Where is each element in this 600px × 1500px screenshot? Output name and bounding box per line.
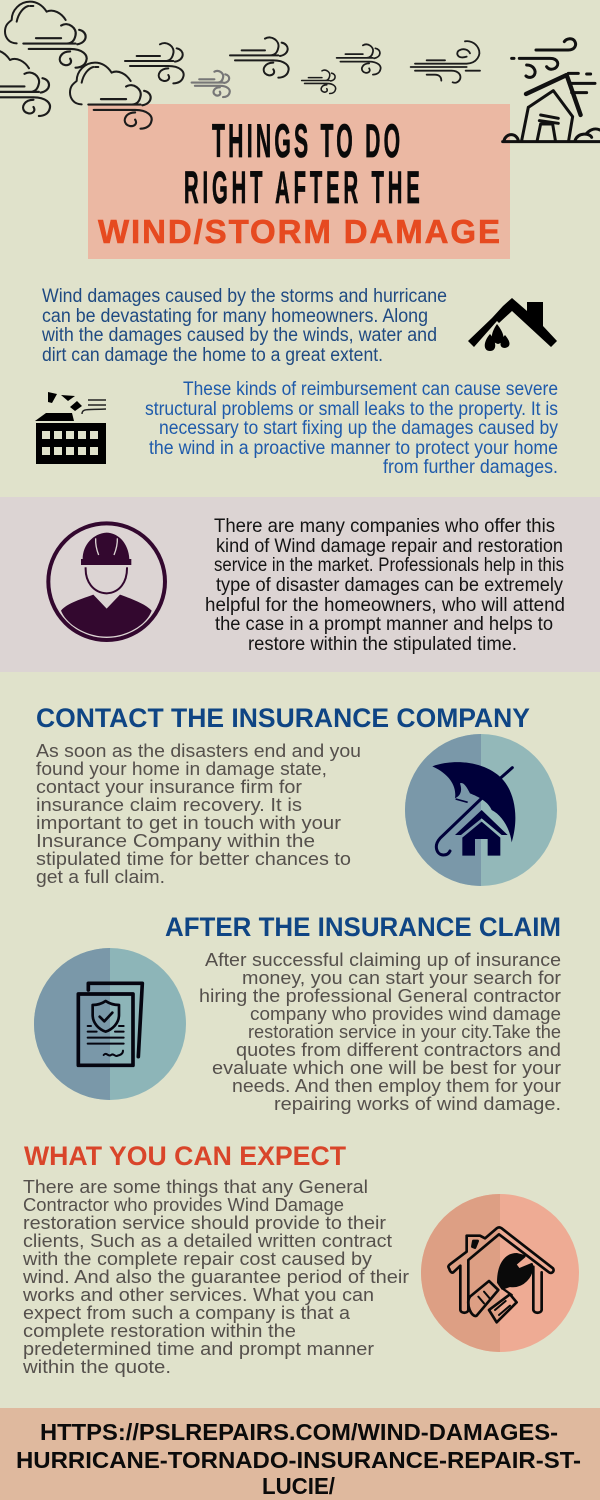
second paragraph: structural problems or small leaks to the property. It is (145, 399, 558, 420)
after-claim text: repairing works of wind damage. (274, 1093, 561, 1114)
panel text: service in the market. Professionals help in this (214, 555, 564, 576)
icon: cloud three (70, 63, 152, 129)
intro paragraph: with the damages caused by the winds, water and (41, 325, 437, 346)
icon: damaged building (35, 392, 106, 464)
expect text: wind. And also the guarantee period of their (22, 1266, 409, 1287)
panel text: type of disaster damages can be extremely (216, 575, 563, 596)
contact text: important to get in touch with your (36, 812, 341, 833)
contact text: Insurance Company within the (36, 830, 315, 851)
icon: insurance document (34, 948, 186, 1100)
heading: contact the insurance company: CONTACT THE INSURANCE COMPANY (36, 703, 530, 733)
second paragraph: from further damages. (383, 457, 558, 478)
panel text: the case in a prompt manner and helps to (215, 614, 553, 635)
footer band (0, 1408, 600, 1500)
footer url: HTTPS://PSLREPAIRS.COM/WIND-DAMAGES- (40, 1419, 558, 1445)
footer url: HURRICANE-TORNADO-INSURANCE-REPAIR-ST- (16, 1447, 581, 1473)
footer url: LUCIE/ (262, 1473, 336, 1499)
expect text: within the quote. (22, 1356, 171, 1377)
intro paragraph: dirt can damage the home to a great extent. (42, 345, 383, 366)
after-claim text: money, you can start your search for (242, 967, 561, 988)
after-claim text (199, 949, 561, 1114)
second paragraph: necessary to start fixing up the damages caused by (159, 418, 558, 439)
icon: cloud one (5, 2, 87, 68)
panel text (205, 516, 565, 655)
icon: grey wind gust (192, 71, 230, 97)
heading: after the insurance claim: AFTER THE INSURANCE CLAIM (165, 912, 561, 942)
expect text: expect from such a company is that a (23, 1302, 351, 1323)
heading: what you can expect: WHAT YOU CAN EXPECT (24, 1141, 346, 1171)
contact text: contact your insurance firm for (36, 776, 302, 797)
footer url (16, 1419, 581, 1499)
panel: companies (0, 497, 600, 672)
expect text: There are some things that any General (23, 1176, 368, 1197)
expect text: with the complete repair cost caused by (22, 1248, 373, 1269)
expect text (22, 1176, 409, 1377)
second paragraph: the wind in a proactive manner to protect your home (149, 438, 558, 459)
expect text: works and other services. What you can (22, 1284, 374, 1305)
icon: large wind (411, 41, 480, 83)
intro paragraph (41, 286, 447, 366)
icon: cloud two (0, 50, 50, 116)
second paragraph: These kinds of reimbursement can cause severe (183, 379, 558, 400)
after-claim text: needs. And then employ them for your (232, 1075, 561, 1096)
expect text: clients, Such as a detailed written contract (23, 1230, 392, 1251)
icon: house with tools (421, 1194, 579, 1352)
icon: wind gust four (302, 70, 336, 93)
contact text: get a full claim. (36, 866, 165, 887)
after-claim text: evaluate which one will be best for your (212, 1057, 561, 1078)
after-claim text: quotes from different contractors and (236, 1039, 561, 1060)
after-claim text: hiring the professional General contractor (199, 985, 561, 1006)
contact text (36, 740, 361, 887)
contact text: found your home in damage state, (36, 758, 327, 779)
after-claim text: After successful claiming up of insurance (205, 949, 561, 970)
icon: wind gust one (125, 43, 184, 83)
after-claim text: company who provides wind damage (250, 1003, 561, 1024)
icon: umbrella and house (405, 734, 557, 886)
icon: worker with helmet (48, 523, 165, 640)
icon: wind gust three (337, 44, 381, 75)
panel text: restore within the stipulated time. (248, 634, 517, 655)
icon: leaking roof (468, 298, 557, 351)
panel text: There are many companies who offer this (214, 516, 555, 537)
title line 3: WIND/STORM DAMAGE (98, 213, 500, 250)
panel text: kind of Wind damage repair and restoration (216, 536, 563, 557)
expect text: restoration service should provide to their (23, 1212, 386, 1233)
contact text: stipulated time for better chances to (36, 848, 351, 869)
expect text: Contractor who provides Wind Damage (23, 1194, 344, 1215)
icons: clouds and wind (0, 2, 381, 129)
contact text: insurance claim recovery. It is (36, 794, 302, 815)
intro paragraph: Wind damages caused by the storms and hurricane (42, 286, 447, 307)
after-claim text: restoration service in your city.Take the (248, 1021, 561, 1042)
expect text: complete restoration within the (23, 1320, 296, 1341)
intro paragraph: can be devastating for many homeowners. Along (42, 306, 428, 327)
title panel (88, 104, 510, 259)
second paragraph (145, 379, 558, 478)
panel text: helpful for the homeowners, who will attend (205, 595, 565, 616)
icon: wind gust two (230, 37, 289, 78)
title line 2: RIGHT AFTER THE (184, 163, 420, 213)
icon: damaged house (503, 39, 600, 142)
expect text: predetermined time and prompt manner (23, 1338, 374, 1359)
title line 1: THINGS TO DO (212, 114, 400, 167)
contact text: As soon as the disasters end and you (36, 740, 361, 761)
